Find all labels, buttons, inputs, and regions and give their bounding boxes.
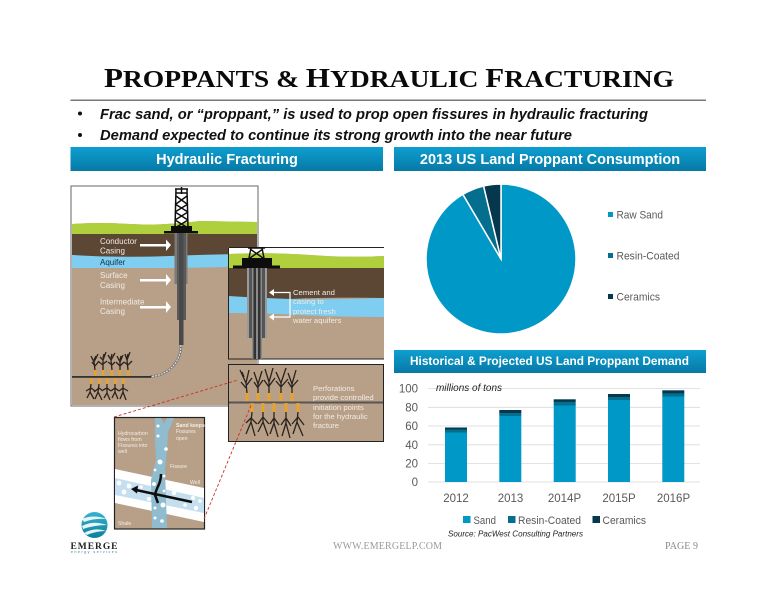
bar chart: proppant demand xyxy=(399,383,700,505)
arrow: hydrocarbon flow xyxy=(136,490,192,502)
panel: perforations detail xyxy=(228,364,384,442)
bar chart: proppant demand: millions of tons xyxy=(436,383,502,394)
arrows: cement bracket xyxy=(272,292,290,317)
bar chart: proppant demand: 80 xyxy=(405,402,418,414)
panel: fissure inset xyxy=(114,418,205,529)
icon: derrick base xyxy=(248,248,265,258)
panel: well diagram: Aquifer xyxy=(100,258,126,267)
heading: hydraulic fracturing: Hydraulic Fracturing xyxy=(156,152,298,168)
bar chart legend: Resin-Coated xyxy=(518,515,581,527)
title: PROPPANTS & HYDRAULIC FRACTURING xyxy=(104,63,674,93)
panel: fissure inset: Fissures xyxy=(176,429,196,435)
pie legend xyxy=(608,210,680,304)
bars: 2014P xyxy=(554,399,576,482)
panel: fissure inset: well xyxy=(118,449,127,455)
panel: fissure inset: Fissures into xyxy=(118,443,148,449)
bar chart: proppant demand: 2012 xyxy=(443,493,469,505)
panel: well diagram: Surface xyxy=(100,271,128,280)
bars: 2013 xyxy=(499,410,521,482)
logo: Emerge Energy Services: EMERGE xyxy=(70,542,118,552)
panel: perforations detail: for the hydraulic xyxy=(313,412,368,421)
panel: well diagram: Casing xyxy=(100,246,125,256)
panel: well diagram: Intermediate xyxy=(100,298,145,306)
bar chart legend: Ceramics xyxy=(602,515,646,527)
panel: well diagram: Casing xyxy=(100,281,125,290)
labels: casing types: Conductor xyxy=(100,237,137,246)
heading: proppant consumption: 2013 US Land Proppant Consumption xyxy=(420,152,680,168)
panel: fissure inset: Sand keeps xyxy=(176,423,205,429)
panel: perforations detail: fracture xyxy=(313,421,339,430)
heading: historical demand: Historical & Projected US Land Proppant Demand xyxy=(410,354,689,368)
panel: cement and casing detail xyxy=(228,247,384,359)
bar chart: proppant demand: 60 xyxy=(405,421,418,433)
panel: perforations detail: initiation points xyxy=(313,403,364,412)
bar chart legend: Sand xyxy=(474,515,496,527)
pie legend: Ceramics xyxy=(616,292,660,304)
pie legend: Resin-Coated xyxy=(616,250,680,262)
footer website: WWW.EMERGELP.COM xyxy=(333,541,442,552)
pie legend: Raw Sand xyxy=(616,210,663,222)
heading: proppant consumption xyxy=(394,147,706,171)
panel: fissure inset: Hydrocarbon xyxy=(118,431,148,437)
bar chart: proppant demand: 100 xyxy=(399,384,418,396)
panel: cement and casing detail: Cement and xyxy=(293,288,335,297)
bars: 2016P xyxy=(662,390,684,482)
heading: hydraulic fracturing xyxy=(70,147,383,171)
bar chart: proppant demand: 2015P xyxy=(602,493,636,505)
proppant grains xyxy=(117,424,202,523)
arrows: casing pointers xyxy=(140,240,171,313)
panel: cement and casing detail: casing to xyxy=(293,297,324,306)
logo: Emerge Energy Services xyxy=(70,512,118,554)
bar chart legend xyxy=(463,515,646,527)
panel: fissure inset: flows from xyxy=(118,437,142,443)
bar chart: proppant demand: 0 xyxy=(412,477,418,489)
icon: drilling derrick xyxy=(175,187,188,228)
panel: perforations detail: provide controlled xyxy=(313,393,374,402)
bar chart: proppant demand: 2014P xyxy=(548,493,581,505)
panel: cement and casing detail: protect fresh xyxy=(293,307,336,316)
bars: 2015P xyxy=(608,394,630,482)
panel: perforations detail: Perforations xyxy=(313,384,355,393)
bar chart: proppant demand: 20 xyxy=(405,458,418,470)
source note: Source: PacWest Consulting Partners xyxy=(448,528,584,538)
heading: historical demand xyxy=(394,350,706,373)
panel: cement and casing detail: water aquifers xyxy=(292,316,341,325)
pie chart: proppant consumption xyxy=(426,184,576,334)
bullet list: Demand expected to continue its strong growth into the near future xyxy=(100,128,572,144)
bar chart: proppant demand: 40 xyxy=(405,440,418,452)
bars: 2012 xyxy=(445,428,467,482)
panel: fissure inset: Shale xyxy=(118,521,131,527)
panel: fissure inset: Fissure xyxy=(170,464,187,470)
bullet list xyxy=(78,107,648,144)
page number: PAGE 9 xyxy=(665,541,698,552)
casing strings xyxy=(247,268,267,338)
bullet list: Frac sand, or “proppant,” is used to prop open fissures in hydraulic fracturing xyxy=(100,107,648,123)
logo: Emerge Energy Services: energy services xyxy=(71,550,117,554)
fractures: main well xyxy=(90,370,130,384)
panel: well diagram xyxy=(71,186,258,406)
panel: well diagram: Casing xyxy=(100,307,125,316)
well casings xyxy=(174,233,188,284)
bar chart: proppant demand: 2016P xyxy=(657,493,690,505)
callout lines xyxy=(114,380,252,519)
panel: fissure inset: open xyxy=(176,436,188,442)
bar chart: proppant demand: 2013 xyxy=(498,493,523,505)
panel: fissure inset: Well xyxy=(190,480,200,486)
